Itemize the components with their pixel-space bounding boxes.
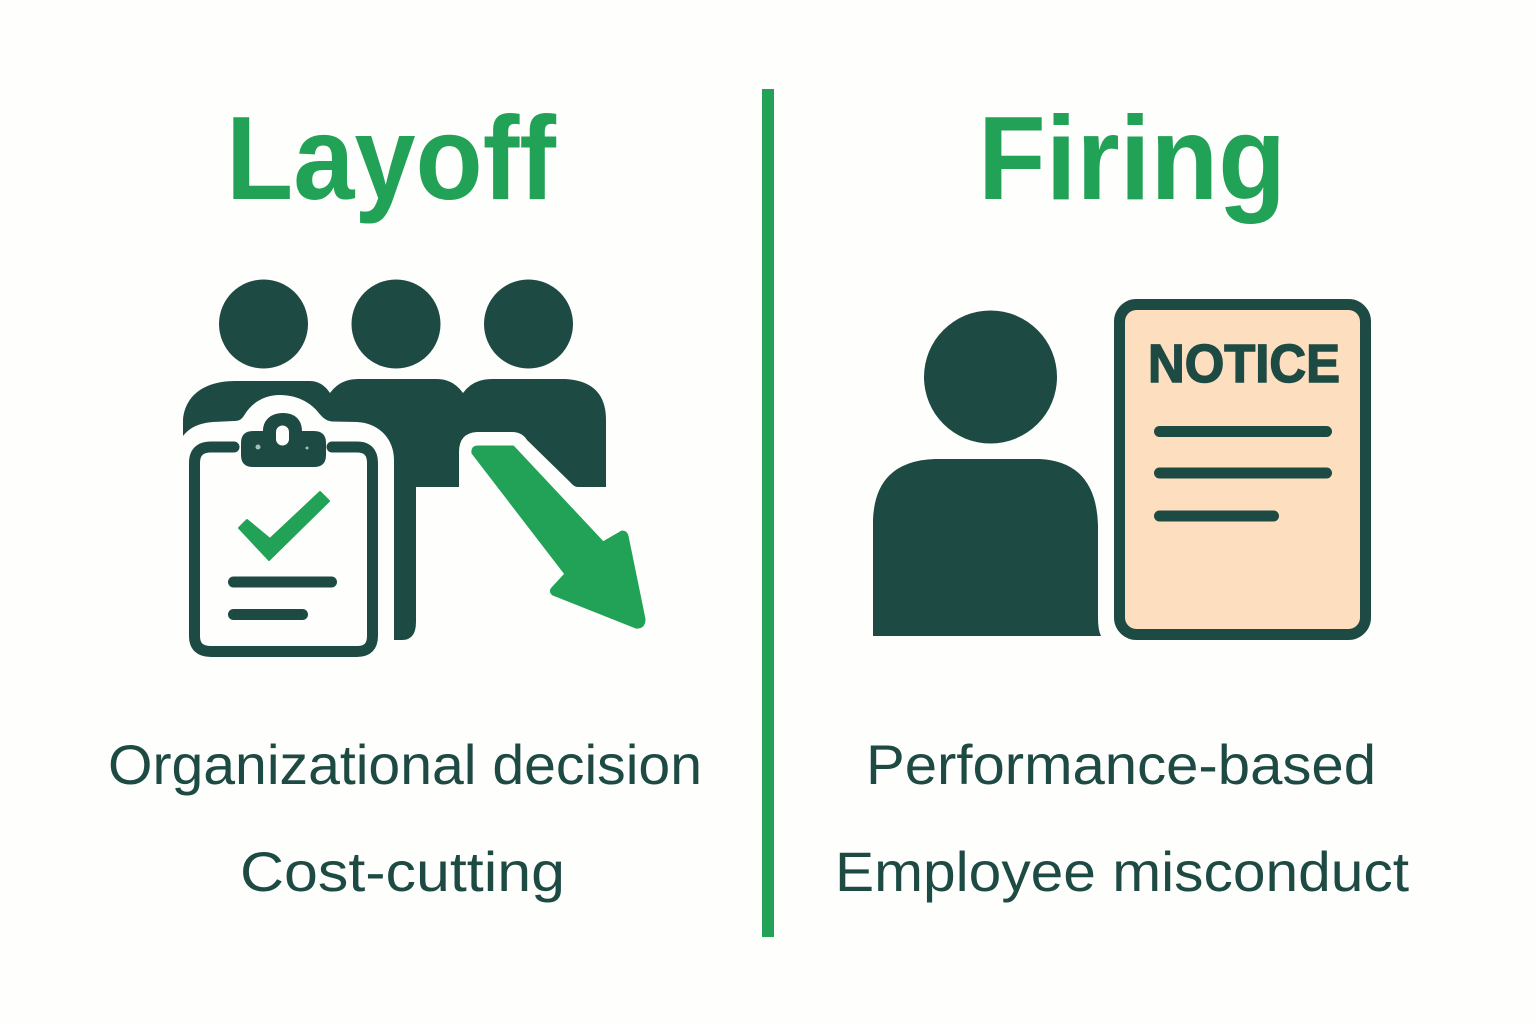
- text: Performance-based: Performance-based: [866, 733, 1376, 796]
- clipboard clip: [241, 413, 326, 467]
- icon: person head: [924, 310, 1057, 444]
- icon: notice document: [1120, 304, 1366, 634]
- document page: [1120, 304, 1366, 634]
- text: Cost-cutting: Cost-cutting: [240, 840, 565, 903]
- heading: Firing: Firing: [978, 92, 1286, 225]
- clipboard line 1: [234, 576, 332, 588]
- clip rivet right: [306, 446, 308, 450]
- icon: clipboard: [194, 413, 372, 652]
- document title: NOTICE: [1148, 334, 1340, 394]
- icon: three people bodies: [183, 379, 606, 640]
- document line 2: [1160, 468, 1326, 478]
- clipboard outline: [194, 447, 372, 652]
- text: Organizational decision: Organizational decision: [108, 733, 702, 796]
- document line 3: [1160, 510, 1274, 522]
- icon: layoff group with clipboard and down arrow: [183, 280, 644, 652]
- icon: green check mark: [239, 492, 329, 560]
- clip rivet left: [256, 444, 260, 450]
- icon: firing person with notice: [873, 304, 1366, 636]
- icon: person body: [873, 459, 1101, 636]
- clipboard line 2: [234, 609, 302, 620]
- text: Employee misconduct: Employee misconduct: [835, 840, 1409, 903]
- icon: green downward arrow: [473, 447, 644, 627]
- icon: three people heads: [219, 280, 573, 368]
- heading: Layoff: Layoff: [226, 92, 556, 225]
- vertical divider: [762, 89, 774, 937]
- clip hole: [276, 426, 289, 446]
- document line 1: [1160, 426, 1326, 437]
